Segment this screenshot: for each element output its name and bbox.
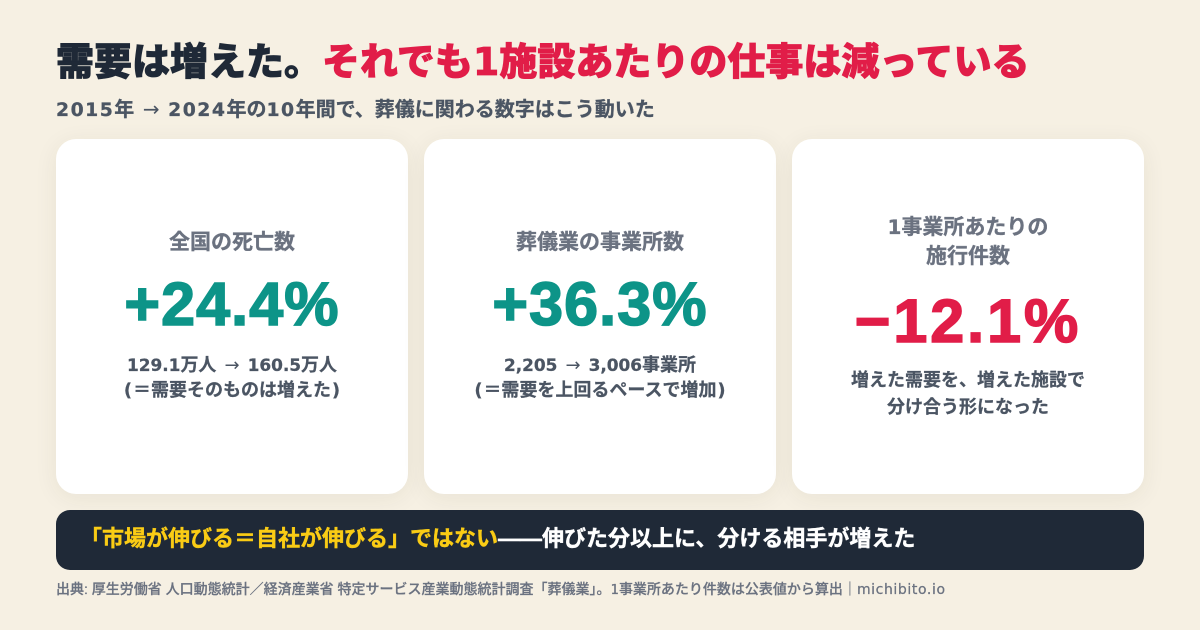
detail: businesses: ): [717, 380, 726, 401]
detail: deaths: 129.1万人 → 160.5万人: [127, 355, 337, 376]
detail: deaths: (: [124, 380, 132, 401]
big number: businesses change: +36.3%: [492, 270, 708, 338]
detail: deaths: [124, 355, 340, 401]
detail: businesses: [474, 355, 726, 401]
source note: 出典: 厚生労働省 人口動態統計／経済産業省 特定サービス産業動態統計調査「葬儀業」。1事業所あたり件数は公表値から算出｜michibito.io: [56, 581, 946, 598]
detail: businesses: ＝需要を上回るペースで増加: [483, 380, 717, 400]
card label: per business: 1事業所あたりの: [888, 216, 1048, 239]
detail: per business: 分け合う形になった: [887, 397, 1049, 417]
subtitle: 2015年 → 2024年の10年間で、葬儀に関わる数字はこう動いた: [56, 97, 655, 121]
detail: per business: 増えた需要を、増えた施設で: [851, 370, 1085, 390]
panel: deaths: [56, 139, 408, 494]
takeaway banner: [56, 510, 1144, 570]
big number: per business change: −12.1%: [855, 287, 1081, 355]
detail: per business: [851, 370, 1085, 417]
detail: businesses: (: [474, 380, 483, 401]
panel: per business: [792, 139, 1144, 494]
card label: per business: [888, 216, 1048, 268]
takeaway banner: 「市場が伸びる＝自社が伸びる」ではない——伸びた分以上に、分ける相手が増えた: [80, 526, 915, 551]
big number: deaths change: +24.4%: [124, 270, 340, 338]
card label: businesses: 葬儀業の事業所数: [516, 231, 684, 254]
detail: businesses: 2,205 → 3,006事業所: [504, 355, 696, 376]
panel: funeral businesses: [424, 139, 776, 494]
card label: per business: 施行件数: [926, 245, 1010, 268]
card label: deaths: 全国の死亡数: [169, 231, 295, 254]
detail: deaths: ＝需要そのものは増えた: [133, 380, 331, 400]
title: 需要は増えた。それでも1施設あたりの仕事は減っている: [56, 40, 1029, 84]
detail: deaths: ): [332, 380, 340, 401]
